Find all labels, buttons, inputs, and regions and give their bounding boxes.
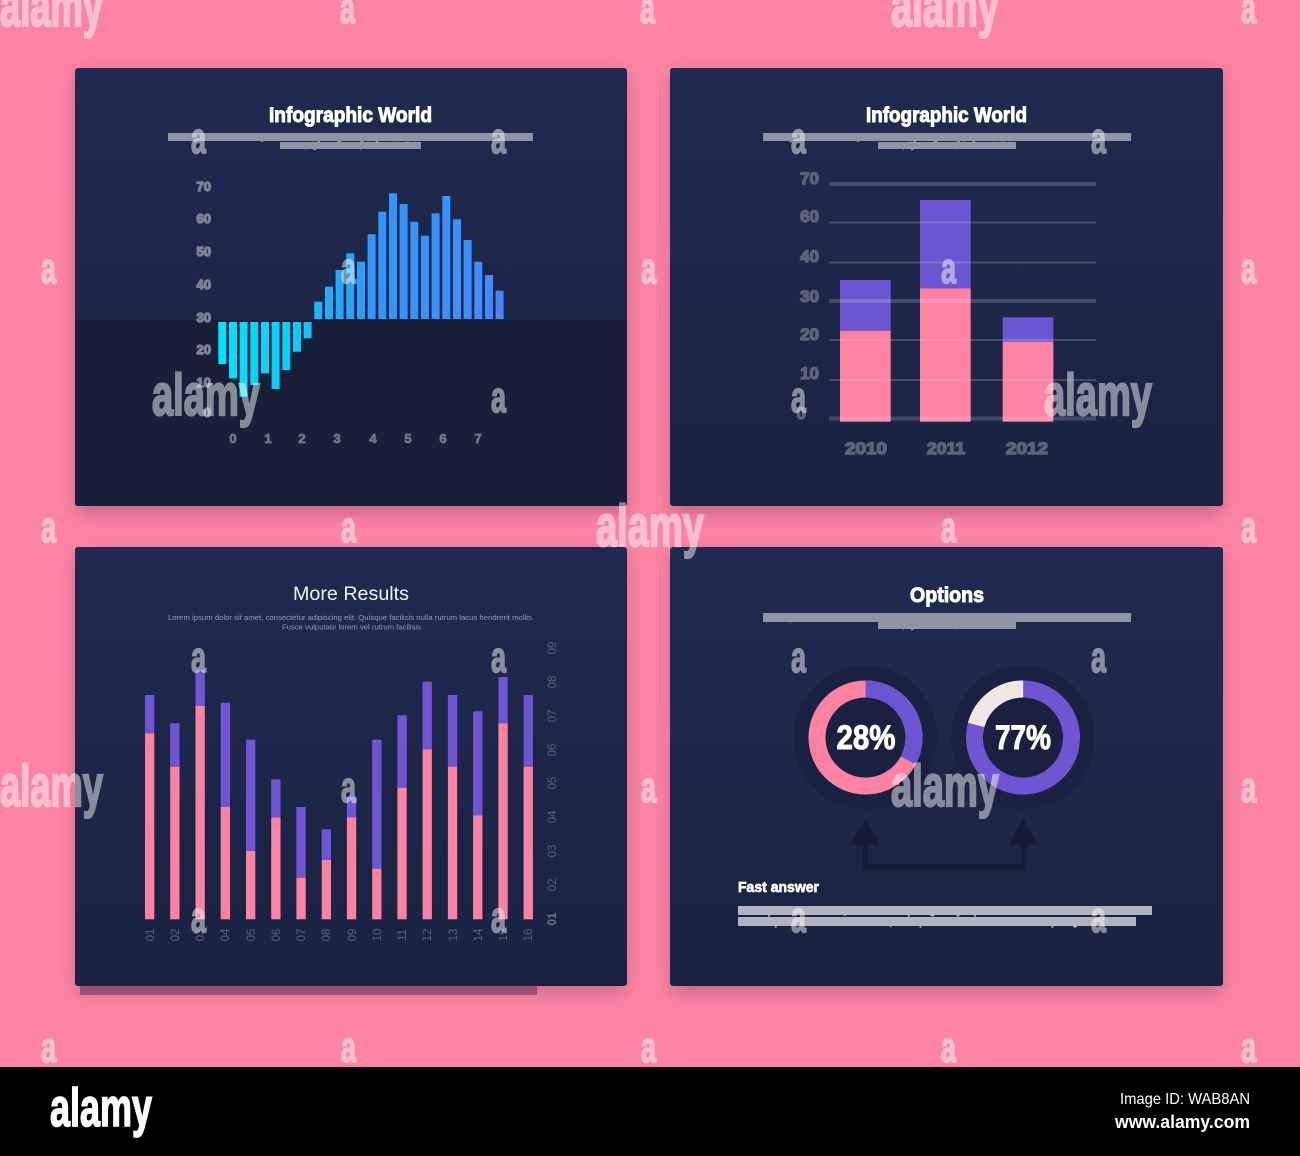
y axis labels: 40 [800, 247, 819, 266]
watermark tiles: a [641, 244, 656, 293]
x axis labels: 03 [195, 929, 207, 941]
positive bars [314, 193, 504, 319]
y axis labels: 08 [547, 676, 559, 688]
x axis labels: 5 [404, 431, 412, 446]
watermark logos: alamy [596, 494, 704, 559]
body text [738, 906, 1152, 927]
y axis labels: 06 [547, 744, 559, 756]
x axis labels: 04 [220, 928, 232, 941]
x axis labels: 6 [439, 431, 447, 446]
y axis labels [197, 179, 211, 420]
y axis labels: 01 [547, 912, 559, 925]
watermark tiles: a [491, 114, 506, 163]
x axis labels: 0 [229, 431, 237, 446]
x axis labels [845, 439, 1048, 458]
watermark tiles: a [491, 893, 506, 942]
watermark tiles: a [791, 373, 806, 422]
watermark tiles: a [341, 503, 356, 552]
y axis labels [797, 169, 819, 423]
negative bars [218, 322, 312, 397]
sub heading: Fast answer [738, 879, 819, 896]
x axis labels: 10 [372, 929, 384, 941]
x axis labels: 4 [369, 431, 377, 446]
watermark logos [0, 0, 1152, 819]
website: www.alamy.com [1114, 1112, 1250, 1132]
watermark tiles: a [1091, 114, 1106, 163]
x axis labels: 13 [448, 929, 460, 941]
x axis labels [229, 431, 482, 446]
y axis labels: 40 [197, 277, 211, 292]
y axis labels: 07 [547, 710, 559, 722]
x axis labels: 2011 [927, 439, 965, 458]
donut: 28% [794, 666, 938, 810]
y axis labels: 09 [547, 642, 559, 654]
description [168, 613, 534, 632]
watermark tiles: a [341, 1023, 356, 1072]
watermark tiles: a [341, 244, 356, 293]
x axis labels: 2012 [1006, 439, 1048, 458]
description: Lorem ipsum dolor sit amet, consectetur adipiscing elit. Quisque facilisis nulla rutrum lacus hendrerit mollis. [169, 135, 532, 142]
x axis labels: 1 [264, 431, 272, 446]
y axis labels: 70 [197, 179, 211, 194]
y axis labels: 04 [547, 810, 559, 823]
x axis labels: 06 [271, 929, 283, 941]
watermark tiles: a [941, 244, 956, 293]
pink bar segments [145, 706, 533, 919]
x axis labels: 3 [333, 431, 341, 446]
watermark tiles: a [191, 633, 206, 682]
watermark tiles: a [1241, 244, 1256, 293]
body text: Fusce vulputate lorem vel rutrum facilisis, lorem ipsum dolor sit amet consectetur adipiscing elit sed rutrum. [739, 917, 1135, 927]
watermark tiles: a [791, 893, 806, 942]
watermark tiles: a [941, 503, 956, 552]
y axis labels [547, 642, 559, 925]
y axis labels: 02 [547, 879, 559, 891]
x axis labels: 16 [523, 929, 535, 941]
watermark tiles: a [1091, 893, 1106, 942]
y axis labels: 60 [800, 207, 819, 226]
heading: Infographic World [866, 104, 1027, 127]
description: Lorem ipsum dolor sit amet, consectetur adipiscing elit. Quisque facilisis nulla rutrum lacus hendrerit mollis. [764, 135, 1130, 142]
y axis labels: 20 [197, 342, 211, 357]
x axis labels: 15 [498, 929, 510, 941]
heading: Infographic World [269, 104, 432, 127]
x axis labels: 01 [145, 929, 157, 941]
x axis labels: 2 [298, 431, 306, 446]
watermark tiles: a [191, 114, 206, 163]
y axis labels: 10 [197, 375, 211, 390]
watermark tiles: a [1241, 763, 1256, 812]
watermark logos: alamy [0, 754, 103, 819]
y axis labels: 60 [197, 211, 211, 226]
y axis labels: 03 [547, 845, 559, 857]
heading: Options [910, 584, 984, 607]
x axis labels: 02 [170, 929, 182, 941]
watermark logos: alamy [1044, 363, 1152, 428]
watermark tiles: a [41, 503, 56, 552]
watermark tiles: a [1091, 633, 1106, 682]
x axis labels: 7 [474, 431, 482, 446]
watermark tiles: a [941, 1023, 956, 1072]
watermark tiles: a [1241, 1023, 1256, 1072]
description: Fusce vulputate lorem vel rutrum facilisis [879, 143, 1016, 150]
watermark tiles: a [41, 1023, 56, 1072]
y axis labels: 70 [800, 169, 819, 188]
panel: options [670, 547, 1223, 991]
y axis labels: 30 [197, 310, 211, 325]
x axis labels: 14 [473, 928, 485, 941]
watermark tiles: a [41, 244, 56, 293]
y axis labels: 30 [800, 287, 819, 306]
arrow: connector between donuts [851, 818, 1038, 870]
panel: more results [75, 547, 627, 995]
watermark tiles: a [791, 633, 806, 682]
footer logo: alamy [50, 1078, 152, 1138]
watermark tiles: a [341, 763, 356, 812]
donut: 28%: 28% [836, 719, 896, 757]
watermark tiles: a [641, 763, 656, 812]
x axis labels: 12 [422, 929, 434, 941]
image id: Image ID: WAB8AN [1120, 1091, 1250, 1108]
description [763, 133, 1131, 150]
panel: stacked bars by year [670, 68, 1223, 512]
description [763, 613, 1131, 630]
y axis labels: 20 [800, 325, 819, 344]
stacked bars [840, 200, 1053, 422]
y axis labels: 10 [800, 364, 819, 383]
y axis labels: 0 [204, 405, 211, 420]
watermark tiles: a [641, 1023, 656, 1072]
description: Fusce vulputate lorem vel rutrum facilisis [282, 622, 421, 632]
x axis labels: 05 [246, 929, 258, 941]
watermark logos: alamy [891, 754, 999, 819]
x axis labels [145, 928, 535, 941]
panel: diverging bar chart [75, 68, 627, 512]
watermark logos: alamy [152, 363, 260, 428]
watermark tiles: a [791, 114, 806, 163]
description: Lorem ipsum dolor sit amet, consectetur adipiscing elit. Quisque facilisis nulla rutrum lacus hendrerit mollis. [764, 615, 1130, 622]
purple bar segments [145, 670, 533, 878]
x axis labels: 08 [321, 929, 333, 941]
heading: More Results [293, 584, 409, 605]
watermark tiles: a [191, 893, 206, 942]
donut: 77% [951, 666, 1095, 810]
description: Fusce vulputate lorem vel rutrum facilisis [281, 143, 421, 150]
x axis labels: 07 [296, 929, 308, 941]
y axis labels: 05 [547, 777, 559, 789]
donut: 77%: 77% [995, 719, 1051, 757]
watermark tiles: a [491, 633, 506, 682]
description [168, 133, 533, 150]
body text: Lorem ipsum dolor sit amet, consectetur adipiscing elit. Quisque facilisis nulla rutrum lacus hendrerit mollis. [739, 906, 1151, 916]
y axis labels: 50 [197, 244, 211, 259]
description: Lorem ipsum dolor sit amet, consectetur adipiscing elit. Quisque facilisis nulla rutrum lacus hendrerit mollis. [168, 613, 534, 622]
footer band [0, 1067, 1300, 1156]
watermark tiles: a [1241, 503, 1256, 552]
x axis labels: 09 [347, 929, 359, 941]
watermark tiles: a [491, 373, 506, 422]
x axis labels: 2010 [845, 439, 887, 458]
x axis labels: 11 [397, 929, 409, 941]
y axis labels: 0 [797, 404, 806, 423]
description: Fusce vulputate lorem vel rutrum facilisis [879, 623, 1016, 630]
